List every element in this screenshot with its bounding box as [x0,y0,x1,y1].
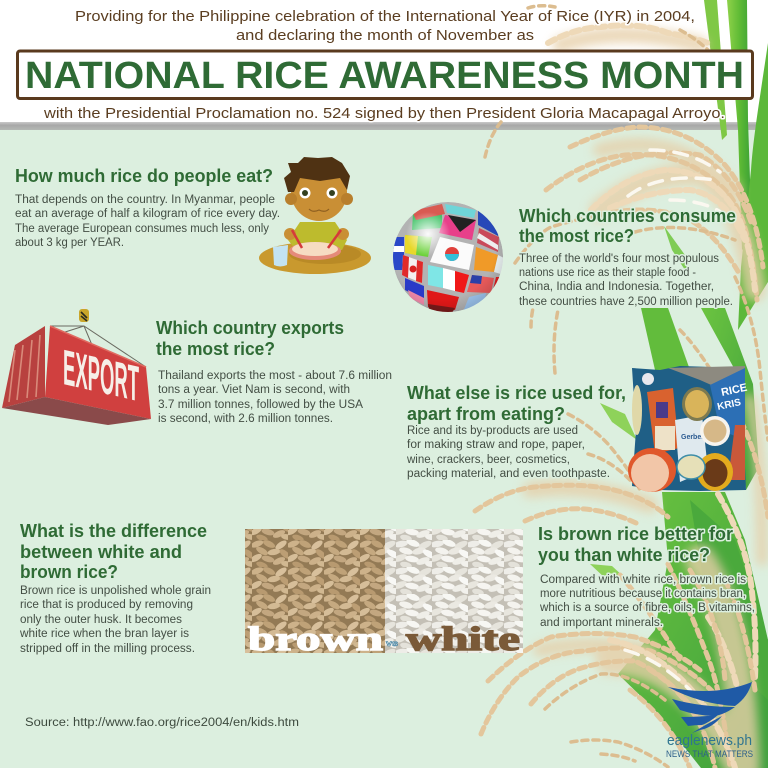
panel: how much rice do people eat [15,166,280,249]
body text: stripped off in the milling process. [20,643,195,655]
title banner: NATIONAL RICE AWARENESS MONTH [25,55,744,97]
heading: the most rice? [156,339,275,359]
body text: eat an average of half a kilogram of rice every day. [15,208,280,220]
body text: The average European consumes much less, only [15,223,269,235]
body text: these countries have 2,500 million people. [519,296,733,308]
body text: rice that is produced by removing [20,599,193,611]
panel: is brown rice better than white rice [538,524,755,629]
label: vs: vs [386,639,399,648]
body text: 3.7 million tonnes, followed by the USA [158,399,363,411]
body text [519,253,733,308]
body text [15,194,280,249]
heading [519,206,736,246]
background: rice leaves [590,0,768,768]
header intro text: and declaring the month of November as [236,27,534,44]
body text: which is a source of fibre, oils, B vitamins, [539,602,755,614]
source citation: Source: http://www.fao.org/rice2004/en/kids.htm [25,717,299,729]
body text [406,425,610,480]
body text: for making straw and rope, paper, [407,439,585,451]
image: rice food products collage: RICE [720,382,748,399]
background: rice panicles [475,6,768,768]
heading: apart from eating? [407,404,565,424]
body text: packing material, and even toothpaste. [407,468,610,480]
body text: is second, with 2.6 million tonnes. [158,413,333,425]
heading [538,524,733,565]
proclamation line: with the Presidential Proclamation no. 524 signed by then President Gloria Macapagal Arroyo. [43,105,725,122]
panel: which country exports the most rice [156,318,392,425]
wordmark: eaglenews.ph [667,732,752,749]
heading: Which countries consume [519,206,736,226]
image: rice food products collage: KRIS [716,397,742,413]
body text: Brown rice is unpolished whole grain [20,585,211,597]
body text [158,370,392,425]
body text: only the outer husk. It becomes [20,614,182,626]
icon: globe of flags [393,202,504,316]
heading: you than white rice? [538,545,710,565]
body text: more nutritious because it contains bran, [540,588,746,600]
soft panicle mass [530,35,762,768]
body text: wine, crackers, beer, cosmetics, [406,454,570,466]
label: brown: brown [248,621,383,658]
body text: nations use rice as their staple food - [519,267,696,279]
label: white: white [406,621,520,658]
heading [20,521,207,582]
body text: tons a year. Viet Nam is second, with [158,384,350,396]
heading [407,383,626,424]
heading: between white and [20,542,182,562]
tagline: NEWS THAT MATTERS [666,749,753,759]
body text: Three of the world's four most populous [519,253,719,265]
header intro text: Providing for the Philippine celebration of the International Year of Rice (IYR) in 2004, [75,8,695,25]
heading: the most rice? [519,226,634,246]
body text: Rice and its by-products are used [407,425,578,437]
panel: what else is rice used for [406,383,626,480]
body text [19,585,211,655]
heading: Is brown rice better for [538,524,733,544]
body text: China, India and Indonesia. Together, [519,281,714,293]
body text: That depends on the country. In Myanmar, people [15,194,275,206]
body text: white rice when the bran layer is [19,628,189,640]
heading: Which country exports [156,318,344,338]
heading: What is the difference [20,521,207,541]
body text [539,574,755,629]
logo: eaglenews.ph [666,682,753,759]
icon: red export shipping container [2,305,151,425]
heading: What else is rice used for, [407,383,626,403]
panel: what is the difference between white and brown rice [19,521,211,655]
icon: blue wing [668,682,752,733]
icon: boy eating rice [259,157,371,274]
body text: Thailand exports the most - about 7.6 million [158,370,392,382]
image: rice food products collage: Gerber [681,434,704,441]
image: rice food products collage [628,366,748,492]
body text: Compared with white rice, brown rice is [540,574,746,586]
body text: about 3 kg per YEAR. [15,237,124,249]
body text: and important minerals. [540,617,663,629]
heading: How much rice do people eat? [15,166,273,186]
header intro text [75,8,695,44]
infographic canvas: EXPORT [63,339,139,412]
panel: which countries consume the most rice [519,206,736,308]
heading: brown rice? [20,562,118,582]
photo: brown vs white rice [245,529,523,658]
heading [156,318,344,359]
